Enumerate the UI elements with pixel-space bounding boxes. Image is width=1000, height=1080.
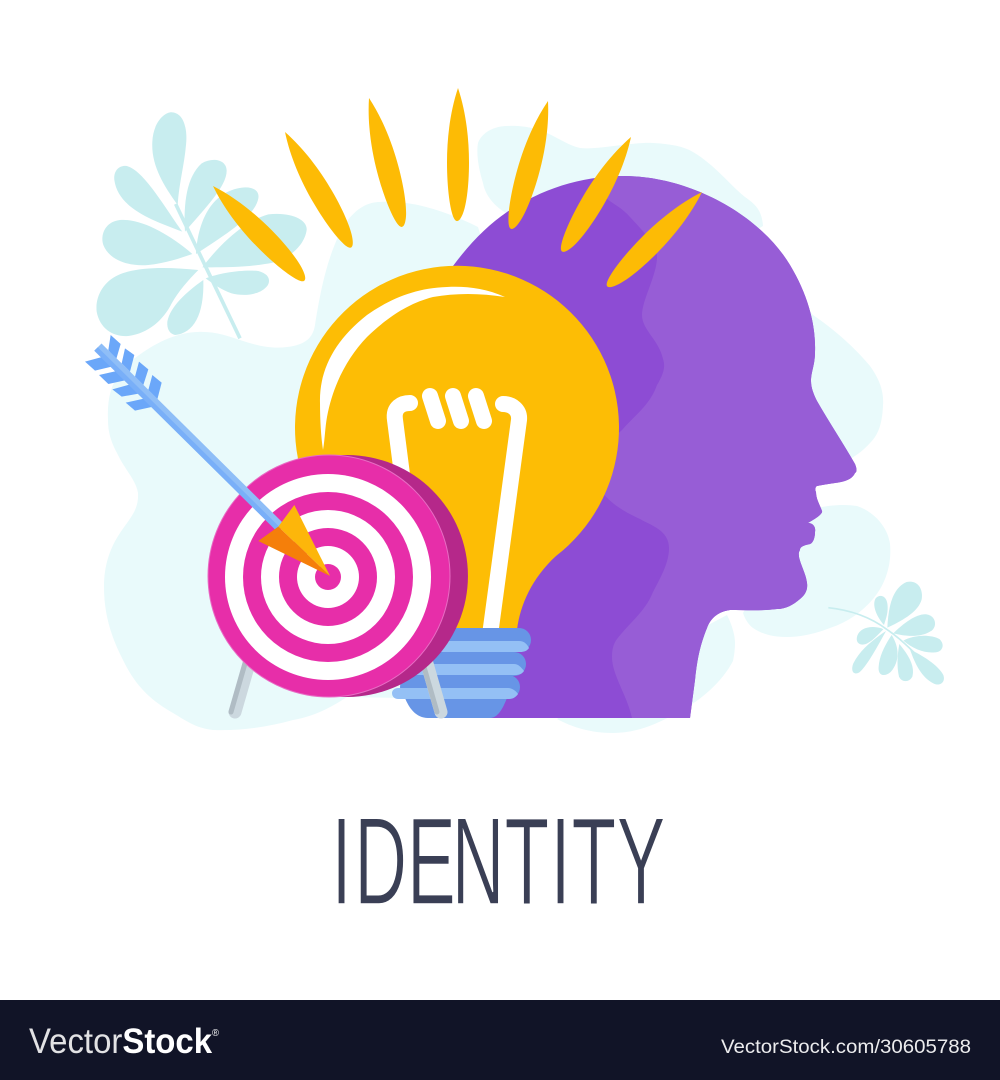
arrow shaft (96, 347, 280, 529)
footer logo: VectorStock (29, 1022, 218, 1061)
arrow head (258, 505, 330, 576)
icon: small leaf sprig (828, 582, 944, 685)
target front rings (208, 455, 450, 697)
footer bar (0, 1000, 1000, 1080)
background blobs (104, 126, 890, 733)
bulb screw base (392, 628, 531, 718)
title: IDENTITY (331, 792, 665, 931)
icon: large leaf sprig (96, 112, 307, 338)
icon: target (208, 455, 468, 697)
footer image id: VectorStock.com/30605788 (721, 1037, 971, 1058)
arrow fletching (85, 335, 162, 411)
bulb highlight (320, 287, 505, 450)
head: light front layer (599, 176, 856, 718)
icon: light rays (205, 88, 710, 295)
icon: arrow (85, 335, 330, 576)
icon: head silhouette (440, 176, 856, 718)
bulb filament (395, 396, 519, 635)
footer logo: ® (212, 1028, 220, 1039)
bulb glass (295, 266, 619, 630)
icon: target stand legs (231, 660, 441, 712)
target side (329, 455, 468, 697)
icon: light bulb (295, 266, 619, 718)
head: dark back layer (440, 176, 856, 718)
